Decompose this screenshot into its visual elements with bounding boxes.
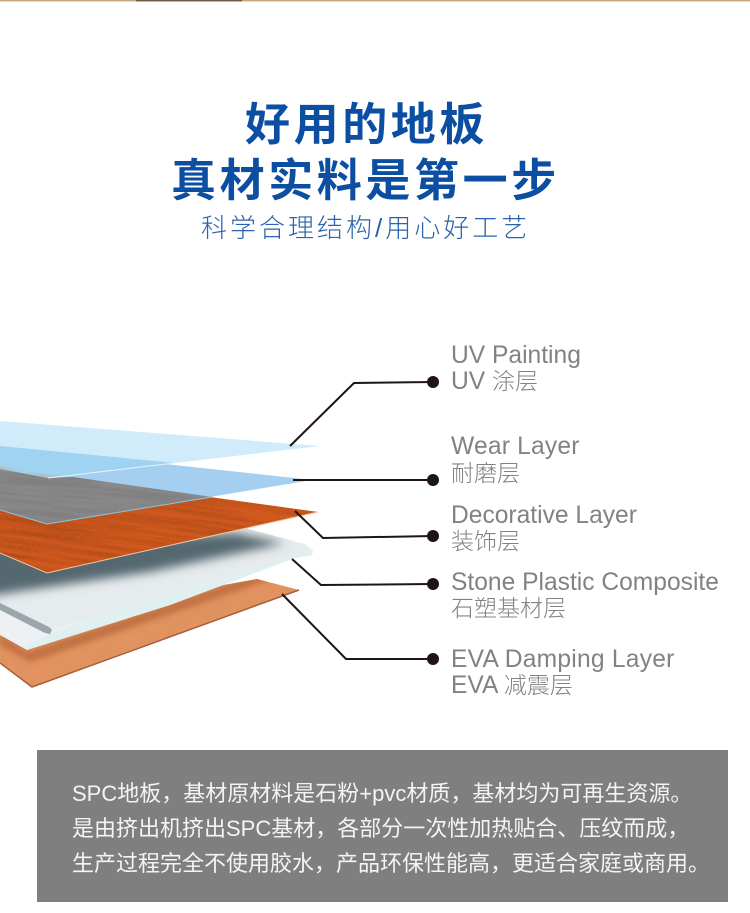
label: Decorative Layer: Decorative Layer (451, 502, 637, 529)
label: Stone Plastic Composite: Stone Plastic Composite (451, 569, 719, 596)
layered floor diagram (0, 421, 319, 688)
description text: 是由挤出机挤出SPC基材，各部分一次性加热贴合、压纹而成， (72, 816, 689, 841)
leader dots (427, 376, 439, 665)
description panel (37, 750, 728, 902)
top strip (0, 0, 750, 1)
label: UV Painting: UV 涂层 (451, 368, 538, 395)
layer: EVA damping (0, 579, 300, 688)
description text (72, 781, 710, 876)
layer: stone plastic composite (0, 525, 320, 650)
subtitle: 科学合理结构/用心好工艺 (201, 213, 530, 243)
label: Wear Layer: Wear Layer (451, 433, 580, 460)
leader lines (282, 382, 433, 659)
label: EVA Damping Layer: EVA 减震层 (451, 672, 573, 699)
label: EVA Damping Layer: EVA Damping Layer (451, 646, 675, 673)
title: 好用的地板 (245, 99, 488, 150)
layer: decorative wood (0, 497, 318, 574)
label: Decorative Layer: 装饰层 (451, 528, 520, 554)
label: UV Painting: UV Painting (451, 342, 581, 369)
title: 真材实料是第一步 (171, 155, 560, 206)
description text: 生产过程完全不使用胶水，产品环保性能高，更适合家庭或商用。 (72, 851, 710, 876)
layer: printed grey (0, 469, 212, 524)
layer: UV film (0, 421, 320, 478)
title (171, 99, 560, 206)
layer: wear (blue film) (0, 446, 312, 524)
description text: SPC地板，基材原材料是石粉+pvc材质，基材均为可再生资源。 (72, 781, 692, 806)
label: Wear Layer: 耐磨层 (451, 460, 520, 486)
label: Stone Plastic Composite: 石塑基材层 (451, 595, 566, 621)
